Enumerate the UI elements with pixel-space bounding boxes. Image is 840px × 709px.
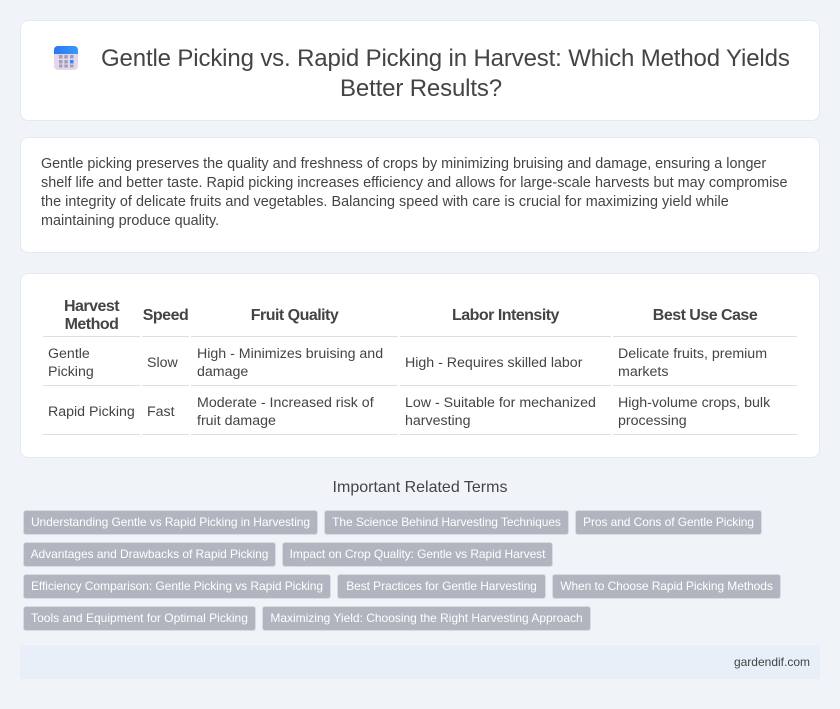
intro text: the integrity of delicate fruits and vegetables. Balancing speed with care is crucial for maximizing yield while <box>41 194 729 210</box>
table row: rapid picking: Rapid Picking <box>48 404 135 420</box>
footer source text: gardendif.com <box>734 655 810 669</box>
table header row: Harvest <box>64 298 119 315</box>
chip <box>575 510 762 535</box>
chip <box>324 510 569 535</box>
heading: related terms: Important Related Terms <box>333 479 507 496</box>
chip: Pros and Cons of Gentle Picking <box>583 515 754 529</box>
chip <box>552 574 781 599</box>
chip: Advantages and Drawbacks of Rapid Picking <box>31 547 268 561</box>
table row: rapid picking: High-volume crops, bulk <box>618 395 770 411</box>
panel: title header <box>20 20 820 121</box>
table row: gentle picking: High - Requires skilled labor <box>405 355 582 371</box>
intro text: Gentle picking preserves the quality and freshness of crops by minimizing bruising and damage, ensuring a longer <box>41 156 766 172</box>
table header row: Method <box>65 316 118 333</box>
chip: Efficiency Comparison: Gentle Picking vs Rapid Picking <box>31 579 323 593</box>
title: Gentle Picking vs. Rapid Picking in Harvest: Which Method Yields <box>101 45 790 72</box>
chip <box>23 606 256 631</box>
chip: Impact on Crop Quality: Gentle vs Rapid Harvest <box>290 547 545 561</box>
chip: Tools and Equipment for Optimal Picking <box>31 611 248 625</box>
table row: rapid picking: harvesting <box>405 413 470 429</box>
table row: rapid picking: fruit damage <box>197 413 276 429</box>
chip: Best Practices for Gentle Harvesting <box>346 579 537 593</box>
chip: Understanding Gentle vs Rapid Picking in Harvesting <box>31 515 310 529</box>
table row: gentle picking: Delicate fruits, premium <box>618 346 767 362</box>
intro text: shelf life and better taste. Rapid picking increases efficiency and allows for large-scale harvests but may compromise <box>41 175 788 191</box>
table header row: Best Use Case <box>653 307 757 324</box>
chip <box>23 574 331 599</box>
chip: When to Choose Rapid Picking Methods <box>560 579 773 593</box>
chip <box>262 606 591 631</box>
icon: calendar <box>54 46 78 70</box>
table header row: Speed <box>143 307 188 324</box>
table header row <box>64 298 758 333</box>
panel: intro paragraph <box>20 137 820 253</box>
title: Better Results? <box>340 75 502 102</box>
table row: gentle picking: damage <box>197 364 248 380</box>
table row: gentle picking <box>48 346 767 380</box>
chip <box>23 510 318 535</box>
table row: gentle picking: Picking <box>48 364 94 380</box>
table row: rapid picking <box>48 395 770 429</box>
table row: gentle picking: High - Minimizes bruising and <box>197 346 383 362</box>
footer bar <box>20 645 820 679</box>
table row: rapid picking: Low - Suitable for mechanized <box>405 395 596 411</box>
chip <box>337 574 546 599</box>
table row: rapid picking: Fast <box>147 404 175 420</box>
chip <box>282 542 553 567</box>
chip <box>23 542 276 567</box>
table row: gentle picking: markets <box>618 364 668 380</box>
chip: The Science Behind Harvesting Techniques <box>332 515 561 529</box>
intro text <box>41 156 788 229</box>
chip: Maximizing Yield: Choosing the Right Harvesting Approach <box>270 611 583 625</box>
table header row: Labor Intensity <box>452 307 559 324</box>
intro text: maintaining produce quality. <box>41 213 219 229</box>
table row: rapid picking: Moderate - Increased risk of <box>197 395 374 411</box>
table row: gentle picking: Gentle <box>48 346 90 362</box>
title <box>101 45 790 102</box>
table row: gentle picking: Slow <box>147 355 178 371</box>
related term chips <box>23 510 781 631</box>
panel: comparison table <box>20 273 820 458</box>
table row: rapid picking: processing <box>618 413 687 429</box>
table header row: Fruit Quality <box>251 307 338 324</box>
